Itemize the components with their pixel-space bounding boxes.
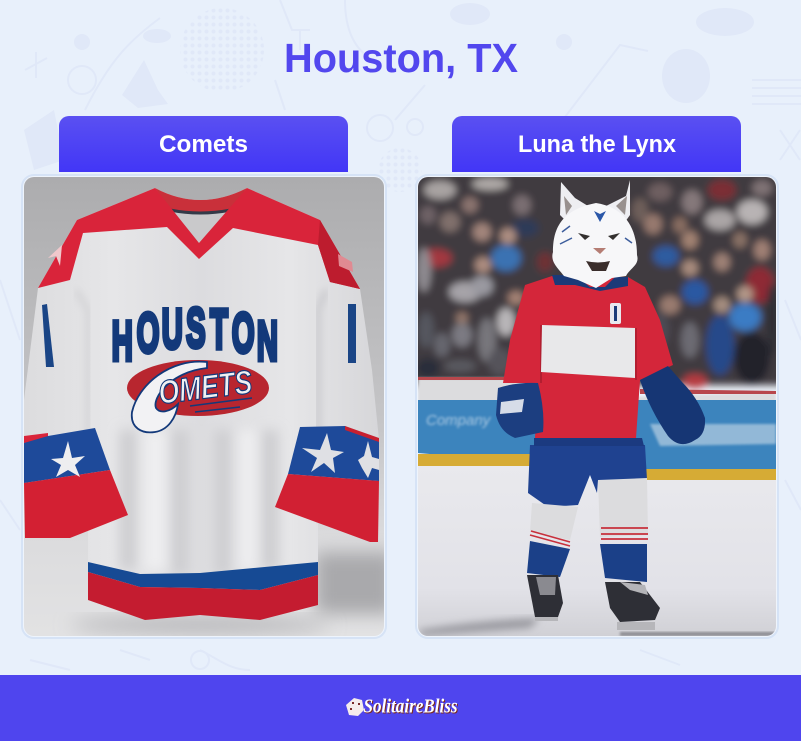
- SolitaireBliss logo: SolitaireBliss: [364, 696, 459, 718]
- hem stripes: [88, 562, 318, 590]
- title: Houston, TX: [284, 35, 518, 81]
- sleeve numbers: [42, 304, 54, 367]
- panel: Luna the Lynx mascot: [410, 116, 785, 640]
- shoulder logos: [48, 245, 62, 266]
- SolitaireBliss logo: SolitaireBliss: [364, 696, 458, 718]
- rink boards: [418, 376, 776, 400]
- icon: playing cards: [346, 698, 364, 716]
- collar inner: [155, 188, 247, 212]
- jersey silhouette: [24, 188, 379, 600]
- HOUSTON wordmark: HOUSTON: [112, 298, 278, 373]
- heading tab: Comets: Comets: [159, 131, 248, 158]
- ice: [418, 466, 776, 640]
- mascot jersey: [503, 275, 673, 446]
- left sock: [530, 503, 578, 540]
- right cuff: [288, 426, 379, 481]
- Comets logo: [127, 360, 269, 432]
- card frame: [22, 175, 386, 638]
- mascot lynx head: [552, 180, 638, 288]
- mascot photo illustration: [410, 170, 785, 640]
- skates: [527, 575, 563, 617]
- heading tab: Luna the Lynx: Luna the Lynx: [518, 131, 677, 158]
- jersey photo illustration: [24, 177, 395, 636]
- shorts: [528, 445, 647, 507]
- mascot legs: [527, 445, 660, 630]
- mascot photo illustration: Company: [426, 412, 492, 429]
- red yoke: [38, 188, 360, 289]
- footer bar: [0, 675, 801, 741]
- heading tab: Luna the Lynx: [452, 116, 741, 172]
- mascot gloves: [496, 366, 705, 444]
- blurred crowd: [410, 170, 785, 388]
- right sock: [598, 478, 648, 537]
- panel: Comets jersey: [22, 116, 395, 638]
- heading tab: Comets: [59, 116, 348, 172]
- left cuff: [24, 433, 48, 443]
- card frame: [416, 175, 778, 638]
- Comets logo: OMETS: [156, 363, 254, 411]
